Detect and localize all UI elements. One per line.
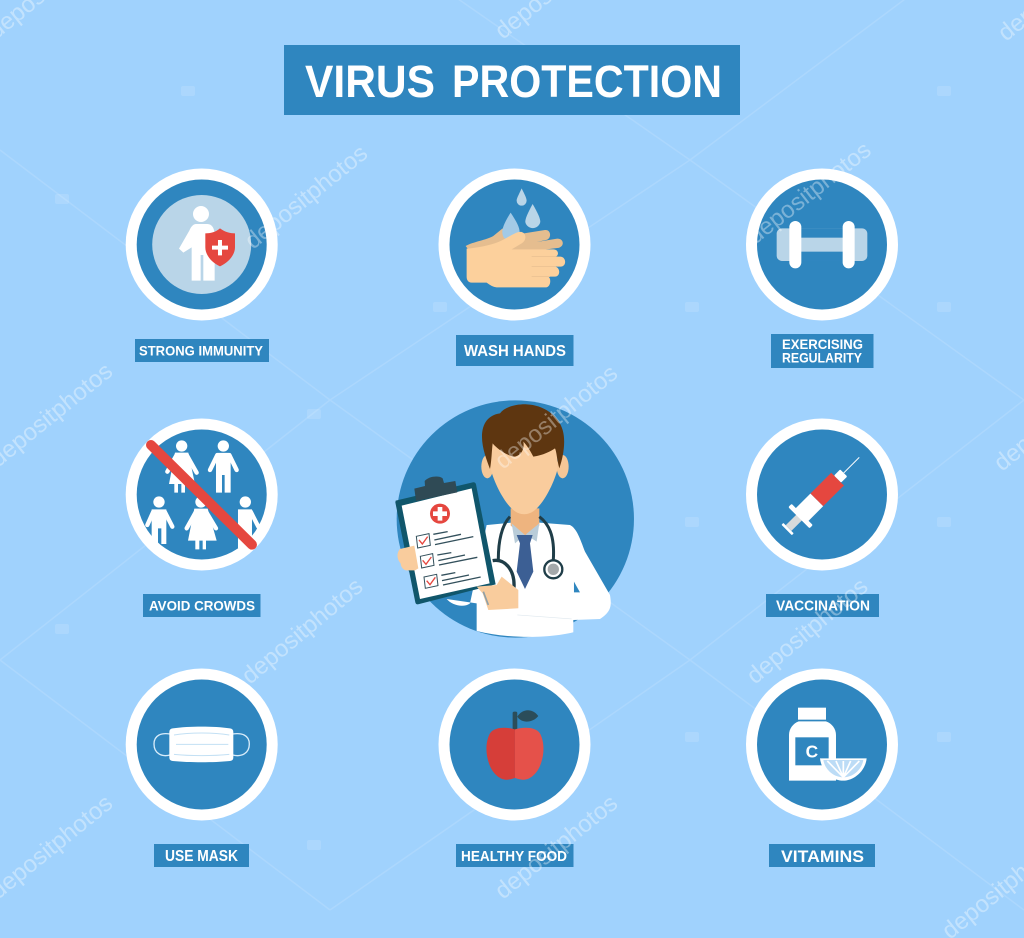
panel: strong immunity [126, 168, 278, 362]
label: strong immunity: STRONG IMMUNITY [139, 342, 264, 358]
title [284, 45, 740, 115]
panel: vaccination [746, 418, 898, 617]
badge: vitamins [746, 668, 898, 820]
label: healthy food: HEALTHY FOOD [461, 848, 567, 865]
panel: doctor illustration [395, 400, 634, 638]
label: exercising regularity: REGULARITY [782, 350, 863, 366]
hair [482, 404, 564, 469]
panel: exercising regularity [746, 168, 898, 368]
badge: avoid crowds [126, 418, 278, 570]
stethoscope [493, 517, 562, 588]
label: use mask [154, 844, 249, 867]
label: avoid crowds [143, 594, 260, 617]
watermark text: depositphotos [742, 136, 876, 250]
icon: vitamin bottle and citrus [789, 708, 867, 781]
left hand [398, 546, 418, 570]
right hand [477, 577, 518, 610]
badge: vaccination [746, 418, 898, 570]
icon: apple [486, 710, 543, 780]
icon: face mask [154, 727, 249, 762]
face [491, 438, 557, 514]
label: exercising regularity: EXERCISING [782, 336, 863, 352]
clipboard clip [414, 477, 457, 501]
label: exercising regularity [771, 334, 874, 368]
coat [447, 523, 611, 637]
panel: use mask [126, 668, 278, 867]
ears [481, 455, 493, 478]
label: vaccination [766, 594, 879, 617]
watermark text: depositphotos [490, 790, 623, 905]
title: PROTECTION [452, 56, 722, 107]
label: avoid crowds: AVOID CROWDS [149, 598, 255, 614]
label: vitamins [769, 844, 875, 867]
label: vitamins: VITAMINS [781, 847, 864, 866]
label: wash hands [456, 335, 574, 366]
icon: vitamin bottle and citrus: C [806, 741, 819, 761]
icon: syringe [776, 447, 870, 541]
title: VIRUS [305, 56, 435, 107]
label: use mask: USE MASK [165, 848, 238, 865]
collar [512, 523, 539, 543]
tie [517, 535, 533, 589]
panel: vitamins [746, 668, 898, 867]
watermark text: depositphotos [490, 360, 623, 475]
icon: dumbbell [777, 221, 867, 268]
label: vaccination: VACCINATION [776, 598, 870, 614]
watermark text: depositphotos [240, 140, 373, 255]
red cross [430, 504, 450, 524]
clipboard [395, 482, 496, 604]
panel: wash hands [438, 168, 590, 366]
watermark text: depositphotos [742, 573, 873, 690]
label: wash hands: WASH HANDS [464, 343, 566, 360]
icon: person with shield [179, 206, 235, 281]
icon: washing hands with drops [466, 188, 565, 287]
watermark text: depositphotos [237, 573, 368, 690]
icon: crowd of people crossed out [147, 440, 258, 549]
badge: strong immunity [126, 168, 278, 320]
neck [511, 508, 539, 537]
badge: use mask [126, 668, 278, 820]
checklist [416, 532, 481, 588]
panel: avoid crowds [126, 418, 278, 617]
panel: healthy food [438, 668, 590, 867]
label: healthy food [456, 844, 574, 867]
badge: wash hands [438, 168, 590, 320]
doctor background circle [397, 400, 634, 638]
doctor figure [395, 404, 611, 637]
badge: exercising [746, 168, 898, 320]
badge: healthy food [438, 668, 590, 820]
label: strong immunity [135, 339, 269, 362]
